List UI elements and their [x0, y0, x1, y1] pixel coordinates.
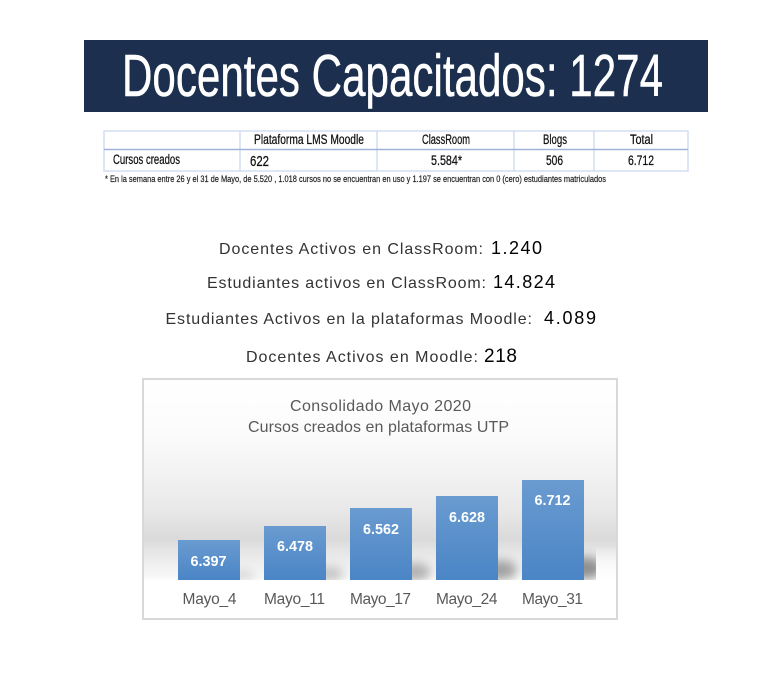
table: courses created: ClassRoom	[422, 132, 470, 147]
bar: Mayo_4: 6.397	[190, 553, 226, 570]
bar: Mayo_24: 6.628	[449, 509, 485, 526]
stat: docentes activos en ClassRoom: Docentes Activos en ClassRoom:	[219, 241, 483, 258]
table footnote: * En la semana entre 26 y el 31 de Mayo, de 5.520 , 1.018 cursos no se encuentran en uso y 1.197 se encuentran con 0 (cero) estudiantes matriculados	[105, 174, 606, 185]
bar: Mayo_17	[350, 508, 412, 580]
bar: Mayo_11	[264, 526, 326, 580]
bar: Mayo_4	[178, 540, 240, 580]
table: courses created: 5.584*	[431, 153, 463, 168]
table: courses created: Cursos creados	[113, 152, 180, 167]
stat: estudiantes activos en Moodle: 4.089	[544, 308, 596, 328]
bar: Mayo_24	[436, 496, 498, 580]
stat: estudiantes activos en ClassRoom: Estudiantes activos en ClassRoom:	[207, 275, 486, 292]
category axis labels: Mayo_24	[436, 591, 498, 608]
stat: estudiantes activos en Moodle: Estudiantes Activos en la plataformas Moodle:	[166, 311, 532, 328]
table: courses created: Plataforma LMS Moodle	[254, 132, 364, 147]
chart title: Consolidado Mayo 2020	[290, 398, 471, 415]
bar: Mayo_11: 6.478	[277, 538, 313, 555]
table: courses created	[104, 131, 688, 171]
stat: docentes activos en ClassRoom: 1.240	[491, 238, 542, 258]
table: courses created: 506	[546, 153, 563, 168]
bar: Mayo_17: 6.562	[363, 521, 399, 538]
chart panel	[143, 379, 617, 619]
table: courses created: 622	[250, 153, 269, 170]
category axis labels	[182, 591, 583, 608]
category axis labels: Mayo_11	[264, 591, 325, 608]
table: courses created: Blogs	[543, 132, 567, 147]
bar: Mayo_31: 6.712	[534, 492, 570, 509]
stat: docentes activos en Moodle: 218	[484, 346, 517, 367]
stat: docentes activos en ClassRoom	[219, 238, 542, 258]
stat: docentes activos en Moodle	[246, 346, 517, 367]
table: courses created: 6.712	[628, 153, 654, 168]
category axis labels: Mayo_4	[182, 591, 237, 608]
stat: docentes activos en Moodle: Docentes Activos en Moodle:	[246, 349, 478, 366]
table: courses created: Total	[630, 132, 653, 147]
stat: estudiantes activos en ClassRoom: 14.824	[493, 272, 555, 292]
chart title	[248, 398, 509, 436]
stat: estudiantes activos en ClassRoom	[207, 272, 555, 292]
bar: Mayo_31	[522, 480, 584, 580]
chart title: Cursos creados en plataformas UTP	[248, 419, 509, 436]
bar shadows	[228, 557, 603, 582]
category axis labels: Mayo_17	[350, 591, 411, 608]
category axis labels: Mayo_31	[522, 591, 583, 608]
